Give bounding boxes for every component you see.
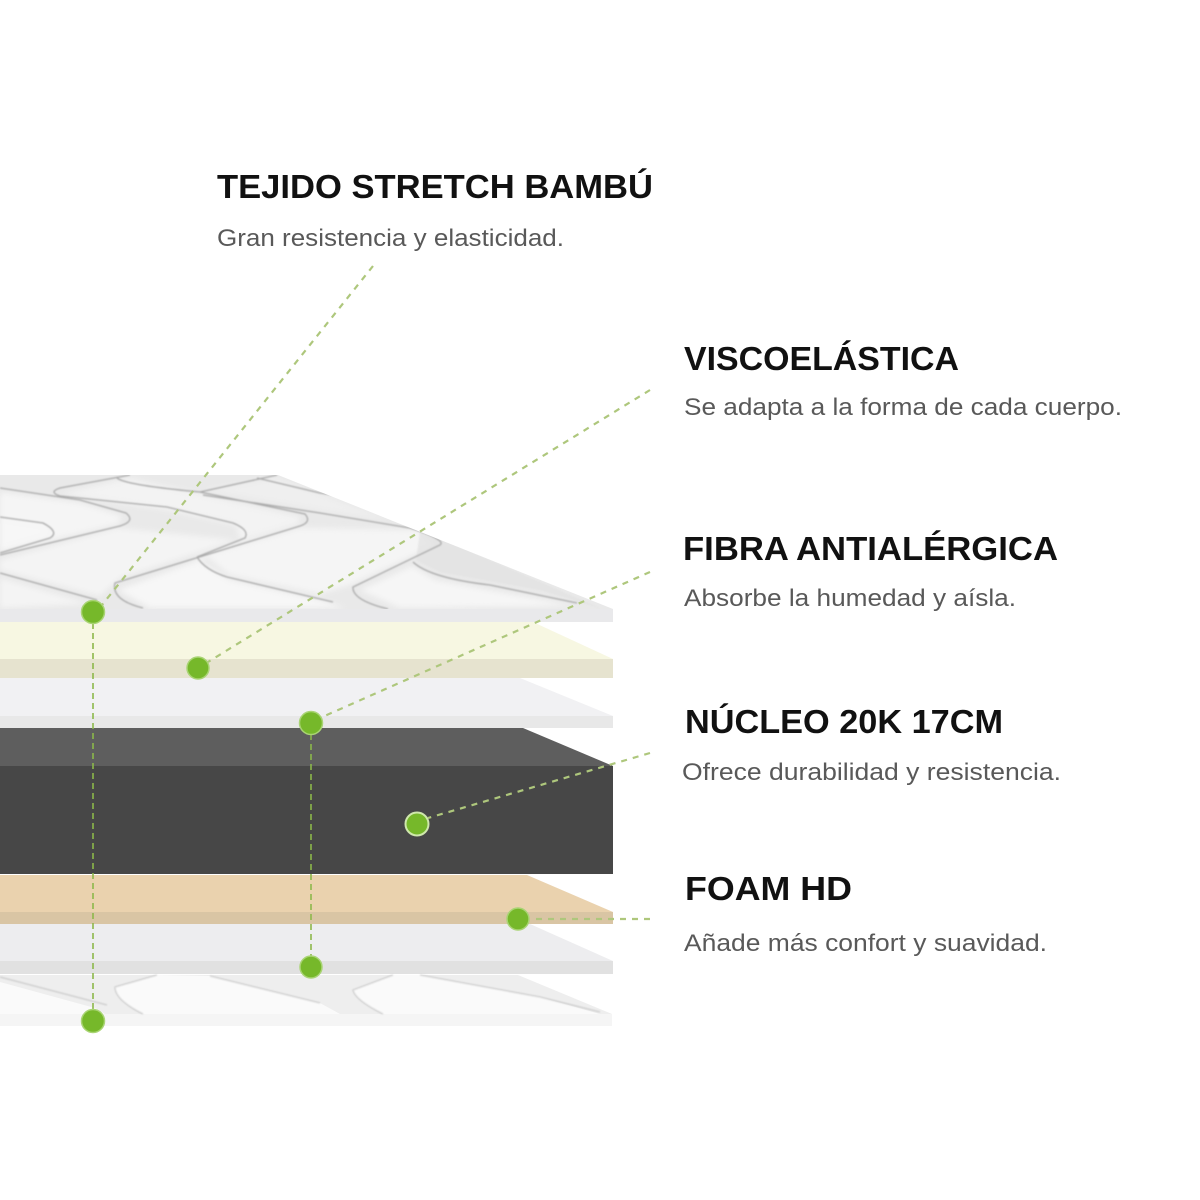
label: núcleo 20k 17cm: Ofrece durabilidad y resistencia. <box>682 759 1061 786</box>
label: fibra antialérgica: Absorbe la humedad y aísla. <box>684 585 1016 612</box>
layer: anti-allergic fibre <box>0 678 613 728</box>
label: viscoelástica: VISCOELÁSTICA <box>684 340 959 377</box>
mattress layers <box>0 475 613 1026</box>
label: fibra antialérgica: FIBRA ANTIALÉRGICA <box>683 530 1058 567</box>
dashed leader lines <box>93 266 650 1010</box>
label: tejido stretch bambú: TEJIDO STRETCH BAMBÚ <box>217 168 653 205</box>
layer: viscoelastic foam <box>0 622 613 678</box>
label: tejido stretch bambú <box>217 168 653 252</box>
label: foam hd <box>684 870 1047 957</box>
label: viscoelástica: Se adapta a la forma de cada cuerpo. <box>684 394 1122 421</box>
marker dots <box>82 600 529 1032</box>
label: núcleo 20k 17cm <box>682 703 1061 786</box>
layer: HD foam <box>0 875 613 924</box>
label: foam hd: Añade más confort y suavidad. <box>684 930 1047 957</box>
layer: lower fibre <box>0 924 613 974</box>
label: fibra antialérgica <box>683 530 1058 612</box>
layer: quilted top cover <box>0 475 613 622</box>
label: viscoelástica <box>684 340 1122 421</box>
label: tejido stretch bambú: Gran resistencia y elasticidad. <box>217 225 564 252</box>
label: foam hd: FOAM HD <box>685 870 852 907</box>
layer: 20K core <box>0 728 613 874</box>
label: núcleo 20k 17cm: NÚCLEO 20K 17CM <box>685 703 1003 740</box>
layer: quilted bottom cover <box>0 975 612 1026</box>
